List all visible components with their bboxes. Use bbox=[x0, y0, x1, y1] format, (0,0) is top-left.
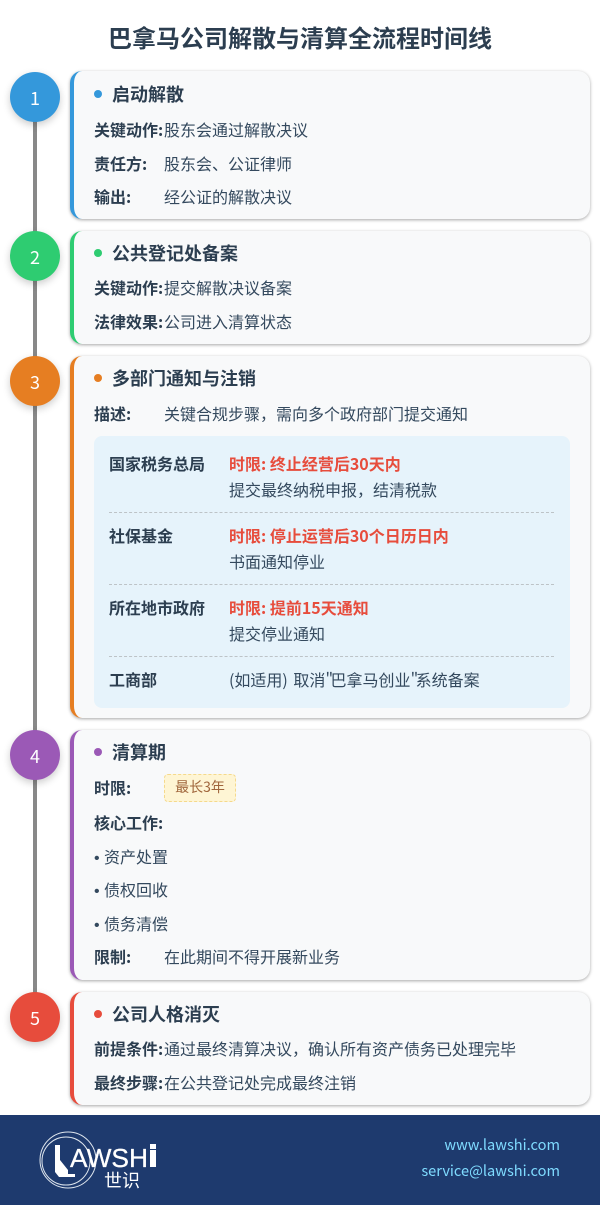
step 2 circle: 2 bbox=[30, 244, 40, 270]
step 1 circle bbox=[10, 72, 60, 122]
step 3 circle: 3 bbox=[30, 369, 40, 395]
heading: 公司人格消灭 bbox=[112, 1001, 220, 1027]
row: output bbox=[94, 184, 292, 208]
list item: • 资产处置 bbox=[94, 844, 168, 868]
row: output: 输出: bbox=[94, 184, 131, 208]
step 3 circle bbox=[10, 356, 60, 406]
row: action bbox=[94, 117, 308, 141]
title: 巴拿马公司解散与清算全流程时间线 bbox=[108, 19, 492, 54]
panel: step 1 bbox=[70, 71, 590, 219]
row: restriction: 在此期间不得开展新业务 bbox=[164, 944, 340, 968]
agency table: 时限: 提前15天通知 bbox=[229, 595, 369, 619]
row: action: 关键动作: bbox=[94, 275, 163, 299]
bullet bbox=[94, 1010, 102, 1018]
agency table: 书面通知停业 bbox=[229, 549, 325, 573]
step 1 circle: 1 bbox=[30, 85, 40, 111]
bullet bbox=[94, 249, 102, 257]
agency table bbox=[94, 436, 570, 708]
agency: social security: 社保基金 bbox=[109, 523, 173, 547]
bullet bbox=[94, 90, 102, 98]
row: core work: 核心工作: bbox=[94, 810, 163, 834]
row: legal effect: 公司进入清算状态 bbox=[164, 309, 292, 333]
row: output: 经公证的解散决议 bbox=[164, 184, 292, 208]
agency table: 时限: 终止经营后30天内 bbox=[229, 451, 401, 475]
row: action: 提交解散决议备案 bbox=[164, 275, 292, 299]
step 5 circle bbox=[10, 992, 60, 1042]
list item: • 债权回收 bbox=[94, 877, 168, 901]
panel: step 5 bbox=[70, 992, 590, 1105]
heading: 清算期 bbox=[112, 739, 166, 765]
row: precondition: 通过最终清算决议，确认所有资产债务已处理完毕 bbox=[164, 1036, 516, 1060]
contact email: service@lawshi.com bbox=[421, 1160, 560, 1181]
logo bbox=[40, 1132, 156, 1193]
bullet bbox=[94, 374, 102, 382]
row: responsible: 股东会、公证律师 bbox=[164, 151, 292, 175]
panel: step 4 bbox=[70, 730, 590, 980]
step 2 circle bbox=[10, 231, 60, 281]
bullet bbox=[94, 748, 102, 756]
logo: 世识 bbox=[104, 1167, 140, 1193]
row: action: 股东会通过解散决议 bbox=[164, 117, 308, 141]
list item: • 债务清偿 bbox=[94, 911, 168, 935]
row: action bbox=[94, 275, 292, 299]
step 5 circle: 5 bbox=[30, 1005, 40, 1031]
agency: tax: 国家税务总局 bbox=[109, 451, 205, 475]
row: responsible bbox=[94, 151, 292, 175]
row: legal effect: 法律效果: bbox=[94, 309, 163, 333]
row: final step: 最终步骤: bbox=[94, 1070, 163, 1094]
step 4 circle: 4 bbox=[30, 743, 40, 769]
agency table: 时限: 停止运营后30个日历日内 bbox=[229, 523, 449, 547]
badge bbox=[164, 774, 236, 802]
agency: commerce: 工商部 bbox=[109, 667, 157, 691]
heading: 公共登记处备案 bbox=[112, 240, 238, 266]
contact website: www.lawshi.com bbox=[444, 1134, 560, 1155]
logo: AWSH bbox=[70, 1143, 148, 1173]
row: description: 描述: bbox=[94, 401, 131, 425]
timeline line bbox=[33, 97, 37, 1017]
row: description: 关键合规步骤，需向多个政府部门提交通知 bbox=[164, 401, 468, 425]
row: legal effect bbox=[94, 309, 292, 333]
agency table: 提交停业通知 bbox=[229, 621, 325, 645]
heading: 多部门通知与注销 bbox=[112, 365, 256, 391]
panel: step 3 bbox=[70, 356, 590, 718]
row: responsible: 责任方: bbox=[94, 151, 147, 175]
panel: step 2 bbox=[70, 231, 590, 344]
badge: 最长3年 bbox=[175, 777, 225, 797]
step 4 circle bbox=[10, 730, 60, 780]
row: final step: 在公共登记处完成最终注销 bbox=[164, 1070, 356, 1094]
agency table: (如适用) 取消"巴拿马创业"系统备案 bbox=[229, 667, 480, 691]
footer bbox=[0, 1115, 600, 1205]
agency: municipality: 所在地市政府 bbox=[109, 595, 205, 619]
heading: 启动解散 bbox=[112, 81, 184, 107]
agency table: 提交最终纳税申报，结清税款 bbox=[229, 477, 437, 501]
row: time limit: 时限: bbox=[94, 775, 131, 799]
row: action: 关键动作: bbox=[94, 117, 163, 141]
row: restriction: 限制: bbox=[94, 944, 131, 968]
row: precondition: 前提条件: bbox=[94, 1036, 163, 1060]
